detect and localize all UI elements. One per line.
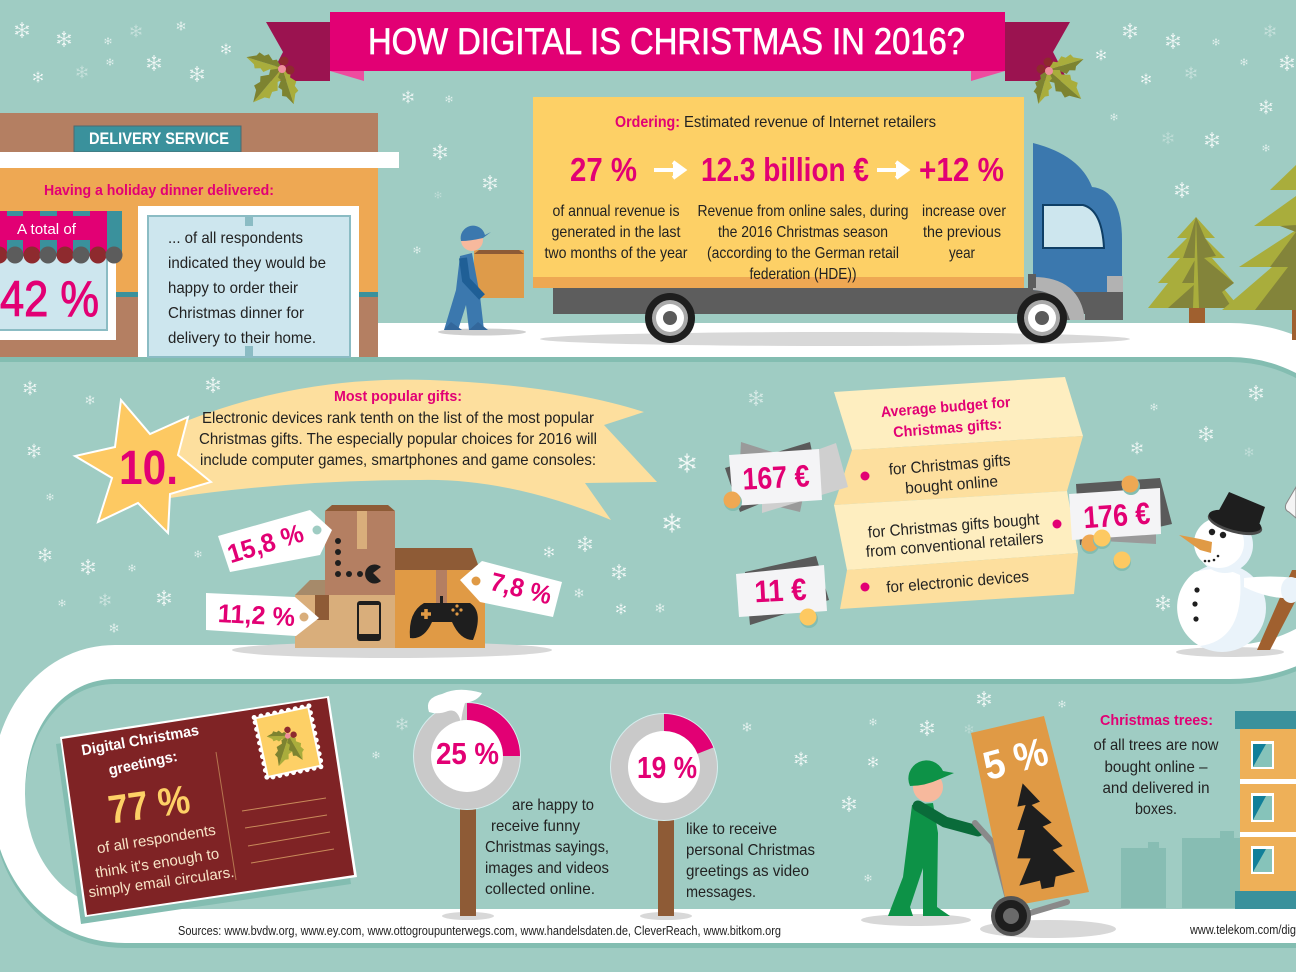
snowy road	[0, 340, 1296, 931]
panel: delivery service building	[0, 113, 399, 357]
truck cargo panel: increase over	[922, 203, 1007, 220]
truck cargo panel	[533, 97, 1024, 288]
panel: average budget folded banner	[834, 377, 1083, 609]
hand truck	[975, 823, 1067, 913]
truck cargo panel: +12 %	[919, 151, 1004, 188]
chart: 25 percent lollipop	[413, 690, 521, 920]
truck cargo panel: generated in the last	[552, 224, 681, 241]
text: christmas trees: boxes.	[1135, 801, 1177, 818]
text: funny sayings: images and videos	[485, 860, 609, 877]
text: funny sayings	[485, 797, 609, 898]
delivery man with parcel	[438, 226, 526, 336]
title: HOW DIGITAL IS CHRISTMAS IN 2016?	[368, 21, 965, 62]
panel: digital christmas greetings postcard: Digital Christmas	[80, 722, 200, 759]
panel: digital christmas greetings postcard: simply email circulars.	[87, 864, 235, 901]
truck cargo panel: the 2016 Christmas season	[718, 224, 888, 241]
text: funny sayings: are happy to	[512, 797, 594, 814]
card: 176 euro	[1069, 476, 1172, 571]
window: 42 percent	[0, 250, 116, 340]
text: video greetings: greetings as video	[686, 863, 809, 880]
panel: average budget folded banner: from conventional retailers	[865, 530, 1044, 561]
text: video greetings	[686, 821, 815, 901]
chart: 25 percent lollipop: 25 %	[436, 736, 499, 771]
panel: truck	[533, 97, 1130, 346]
tag: 7,8 percent	[460, 561, 562, 617]
delivery man with tree box	[861, 716, 1116, 938]
card: 176 euro: 176 €	[1082, 496, 1151, 535]
panel: digital christmas greetings postcard: of all respondents	[96, 822, 217, 857]
text: funny sayings: Christmas sayings,	[485, 839, 609, 856]
card: 11 euro	[736, 556, 829, 628]
panel: average budget folded banner: for Christmas gifts	[888, 452, 1011, 479]
arrow	[877, 162, 907, 178]
text: funny sayings: receive funny	[491, 818, 580, 835]
text: video greetings: personal Christmas	[686, 842, 815, 859]
panel: most popular gifts ribbon: include computer games, smartphones and game consoles:	[200, 452, 596, 469]
sign: delivery service: DELIVERY SERVICE	[89, 129, 229, 148]
door: respondents text: happy to order their	[168, 280, 299, 297]
stamp	[254, 706, 322, 778]
star: rank 10: 10.	[119, 442, 178, 495]
panel: most popular gifts ribbon: Most popular gifts:	[334, 388, 462, 405]
truck cargo panel: Revenue from online sales, during	[698, 203, 908, 220]
panel: most popular gifts ribbon: Electronic devices rank tenth on the list of the most popular	[202, 410, 595, 427]
truck cargo panel: 12.3 billion €	[701, 151, 869, 188]
box: game console	[395, 548, 485, 648]
door: respondents text: indicated they would be	[168, 255, 326, 272]
gift boxes	[206, 505, 562, 658]
truck cargo panel: (according to the German retail	[707, 245, 899, 262]
panel: average budget folded banner: Christmas gifts:	[893, 416, 1003, 441]
icon: holly left	[244, 48, 303, 110]
background city silhouettes	[1121, 831, 1240, 908]
truck cargo panel: two months of the year	[544, 245, 688, 262]
awning: A total of	[17, 221, 77, 238]
panel: digital christmas greetings postcard: 77 %	[106, 778, 193, 833]
door: respondents text: delivery to their home.	[168, 330, 316, 347]
box: computer game	[325, 505, 395, 595]
truck cargo panel: 27 %	[570, 151, 637, 188]
truck cargo panel: Ordering:	[615, 114, 680, 131]
text: christmas trees: Christmas trees:	[1100, 712, 1213, 729]
panel: digital christmas greetings postcard: greetings:	[107, 748, 179, 779]
card: 167 euro: 167 €	[742, 458, 810, 497]
door: respondents text: ... of all respondents	[168, 230, 303, 247]
text: christmas trees: of all trees are now	[1094, 737, 1219, 754]
heading: holiday dinner: Having a holiday dinner delivered:	[44, 182, 274, 199]
panel: most popular gifts ribbon	[165, 380, 657, 520]
panel: average budget folded banner: for electronic devices	[886, 568, 1030, 597]
truck cargo panel: Estimated revenue of Internet retailers	[684, 114, 936, 131]
panel: average budget folded banner: for Christmas gifts bought	[867, 511, 1041, 542]
snowman	[1176, 487, 1296, 657]
door: respondents text	[138, 206, 359, 357]
card: 11 euro: 11 €	[754, 572, 807, 609]
chart: 19 percent lollipop: 19 %	[637, 750, 697, 785]
panel: average budget folded banner: bought online	[905, 473, 999, 498]
arrow	[654, 162, 684, 178]
panel: average budget folded banner: Average budget for	[880, 394, 1011, 421]
truck cargo panel: of annual revenue is	[552, 203, 680, 220]
sources: Sources: www.bvdw.org, www.ey.com, www.ottogroupunterwegs.com, www.handelsdaten.de, CleverReach, www.bitkom.org	[178, 924, 781, 938]
panel: most popular gifts ribbon: Christmas gifts. The especially popular choices for 2016 will	[199, 431, 597, 448]
tag: 15,8 percent: 15,8 %	[224, 518, 307, 569]
door: respondents text: Christmas dinner for	[168, 305, 305, 322]
title banner	[266, 12, 1070, 81]
signpost	[1285, 487, 1296, 518]
tag: 11,2 percent	[206, 593, 319, 636]
panel: digital christmas greetings postcard	[56, 696, 357, 924]
box: smartphone	[295, 580, 395, 648]
panel: digital christmas greetings postcard: think it's enough to	[94, 845, 220, 882]
card: 167 euro	[724, 442, 848, 513]
star: rank 10	[75, 400, 211, 533]
text: christmas trees	[1094, 712, 1219, 818]
pine trees	[1148, 165, 1296, 340]
awning	[0, 211, 122, 264]
text: video greetings: messages.	[686, 884, 756, 901]
icon: holly right	[1030, 50, 1088, 107]
truck cargo panel: year	[949, 245, 976, 262]
text: funny sayings: collected online.	[485, 881, 595, 898]
text: christmas trees: bought online –	[1104, 759, 1208, 776]
text: video greetings: like to receive	[686, 821, 777, 838]
wheel	[991, 896, 1031, 936]
truck cargo panel: federation (HDE))	[750, 266, 856, 283]
chart: 19 percent lollipop	[610, 713, 718, 920]
tag: 15,8 percent	[218, 510, 332, 572]
tag: 11,2 percent: 11,2 %	[217, 598, 296, 632]
tree box: 5 %	[979, 730, 1053, 789]
tree box	[971, 716, 1089, 907]
window: 42 percent: 42 %	[0, 271, 99, 327]
truck cargo panel: the previous	[923, 224, 1001, 241]
tag: 7,8 percent: 7,8 %	[487, 566, 555, 610]
text: christmas trees: and delivered in	[1102, 780, 1210, 797]
sign: delivery service	[74, 126, 241, 152]
apartment building	[1235, 711, 1296, 909]
truck cab	[1028, 143, 1123, 320]
